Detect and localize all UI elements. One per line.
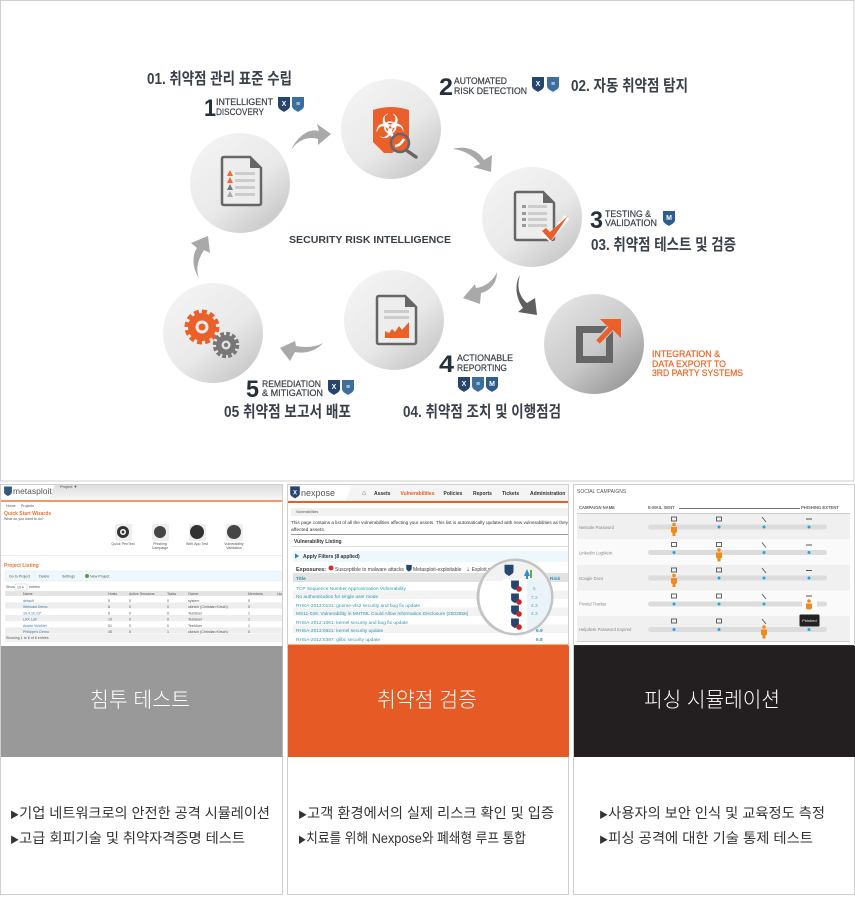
screenshot: nexpose: nexpose: [301, 488, 335, 498]
screenshot: nexpose: ⇣ Exploit public: [466, 567, 502, 573]
screenshot: metasploit: 0: [129, 618, 131, 622]
screenshot: nexpose: Apply Filters (8 applied): [303, 554, 360, 560]
screenshot: metasploit: Project ▼: [60, 484, 78, 489]
step 4 label: [439, 351, 513, 378]
step 2 product icons: ≡: [551, 81, 555, 88]
screenshot: metasploit: Home: [6, 504, 16, 508]
step 3 product icon: M: [666, 215, 672, 222]
screenshot: social campaigns: Netsuite Password: [579, 525, 615, 530]
screenshot: metasploit: Upd: [277, 592, 284, 596]
integration label: DATA EXPORT TO: [652, 359, 726, 370]
screenshot: metasploit: Quick Start Wizards: [4, 511, 51, 517]
bullet list: penetration testing: ▶고급 회피기술 및 취약자격증명 테스트: [10, 830, 245, 846]
screenshot: metasploit: 0: [129, 599, 131, 603]
center title: SECURITY RISK INTELLIGENCE: [289, 234, 451, 246]
step 2 circle: biohazard shield: [341, 79, 441, 179]
step 1 label: [204, 95, 273, 122]
screenshot: nexpose: Assets: [374, 491, 391, 497]
bullet list: phishing simulation: [599, 805, 825, 846]
tooltip: Phished: [802, 618, 817, 623]
bullet list: penetration testing: [10, 805, 270, 846]
screenshot: metasploit: Settings: [62, 574, 75, 578]
step 2 product icons: X: [536, 81, 541, 88]
stage icons: [672, 517, 812, 624]
orange markers: [671, 523, 817, 638]
step 4 label: REPORTING: [457, 363, 507, 374]
screenshot: metasploit: Tasks: [167, 592, 176, 596]
step 5 heading: 05 취약점 보고서 배포: [224, 403, 351, 421]
screenshot: metasploit: Active Sessions: [129, 592, 155, 596]
screenshot: nexpose: Title: [296, 576, 306, 582]
step 3 label: 3: [590, 207, 603, 234]
step 4 circle: report with chart: [344, 270, 444, 370]
integration circle: export icon: [544, 294, 644, 394]
screenshot: social campaigns: [574, 485, 854, 646]
panel: vulnerability validation: [288, 484, 569, 894]
screenshot: nexpose: MS11-026: Vulnerability in MHTML Could Allow Information Disclosure (2503658): [296, 611, 469, 617]
screenshot: metasploit: ckirsch (Christian Kirsch): [188, 605, 228, 609]
screenshot: social campaigns: Pivotal Tracker: [579, 602, 607, 606]
step 5 product icons: X: [332, 384, 337, 391]
step 1 label: 1: [204, 95, 216, 122]
screenshot: metasploit: Project Listing: [4, 563, 39, 569]
screenshot: metasploit: Vulnerability: [224, 542, 244, 546]
screenshot: social campaigns: LinkedIn LogMeIn: [579, 550, 613, 556]
screenshot: metasploit: TestUser: [188, 618, 203, 622]
screenshot: metasploit: 0: [248, 605, 250, 609]
bullet list: vulnerability validation: ▶고객 환경에서의 실제 리스크 확인 및 입증: [298, 805, 554, 821]
step 5 product icons: [328, 380, 354, 395]
step 4 product icons: M: [489, 381, 495, 388]
band: vulnerability validation: 취약점 검증: [377, 689, 477, 712]
screenshot: nexpose: Vulnerabilities: [400, 491, 435, 497]
step 3 product icon: [663, 211, 675, 226]
band: penetration testing: [1, 646, 282, 757]
screenshot: metasploit: Name: [23, 592, 33, 596]
screenshot: metasploit: Show: [6, 585, 15, 589]
step 1 label: DISCOVERY: [216, 107, 265, 118]
screenshot: metasploit: Campaign: [152, 546, 168, 550]
screenshot: metasploit: system: [188, 599, 199, 603]
screenshot: nexpose: RHSA-2012:1061: kernel security and bug fix update: [296, 620, 408, 626]
step 3 label: [590, 207, 657, 234]
screenshot: metasploit: 0: [129, 624, 131, 628]
step 5 product icons: ≡: [346, 384, 350, 391]
screenshot: nexpose: RHSA-2013:0131: gnome-vfs2 security and bug fix update: [296, 603, 420, 609]
screenshot: metasploit: Owner: [188, 592, 199, 596]
integration label: 3RD PARTY SYSTEMS: [652, 368, 743, 379]
screenshot: metasploit: 0: [129, 612, 131, 616]
screenshot: nexpose: Vulnerabilities: [296, 510, 318, 514]
tracks: [648, 524, 827, 632]
step 2 label: [439, 74, 527, 101]
screenshot: metasploit: Webcast Demo: [23, 605, 48, 609]
screenshot: metasploit: TestUser: [188, 612, 203, 616]
step 1 label: INTELLIGENT: [216, 97, 273, 108]
screenshot: metasploit: Austin VulnNet: [23, 624, 47, 628]
magnifier: 7.2: [531, 595, 538, 601]
arrow: step 5 to step 1: [191, 236, 210, 278]
screenshot: metasploit: Go to Project: [9, 574, 30, 578]
band: penetration testing: 침투 테스트: [90, 689, 190, 712]
panel: phishing simulation: [574, 484, 855, 894]
step 1 heading: 01. 취약점 관리 표준 수립: [147, 70, 292, 88]
step 1 product icons: X: [282, 101, 287, 108]
screenshot: metasploit: 1: [248, 612, 250, 616]
step 2 label: AUTOMATED: [454, 76, 507, 87]
screenshot: metasploit: 0: [129, 630, 131, 634]
screenshot: metasploit: 0: [248, 599, 250, 603]
screenshot: metasploit: 10: [108, 618, 112, 622]
step 5 circle: gears: [163, 283, 263, 383]
step 1 product icons: ≡: [296, 101, 300, 108]
screenshot: metasploit: 0: [167, 599, 169, 603]
bullet list: vulnerability validation: [298, 805, 554, 846]
panel: security risk intelligence cycle: [0, 0, 854, 481]
screenshot: metasploit: 10 ▾: [17, 586, 24, 590]
screenshot: metasploit: 0: [167, 612, 169, 616]
screenshot: metasploit: Phishing: [153, 542, 167, 546]
screenshot: social campaigns: Google Docs: [579, 576, 603, 581]
screenshot: metasploit: 10.4.10.23*: [23, 612, 42, 616]
magnifier: 4.3: [531, 611, 538, 617]
screenshot: nexpose: [288, 485, 569, 646]
screenshot: nexpose: 6.9: [536, 628, 543, 634]
screenshot: social campaigns: PHISHING EXTENT: [801, 505, 839, 510]
screenshot: nexpose: Exposures:: [296, 567, 326, 573]
step 4 heading: 04. 취약점 조치 및 이행점검: [403, 402, 561, 421]
screenshot: metasploit: Showing 1 to 6 of 6 entries: [6, 636, 49, 640]
screenshot: metasploit: TestUser: [188, 624, 203, 628]
screenshot: metasploit: 1: [248, 618, 250, 622]
bullet list: phishing simulation: ▶사용자의 보안 인식 및 교육정도 측정: [599, 805, 825, 821]
screenshot: metasploit: Quick PenTest: [111, 542, 135, 546]
band: vulnerability validation: [288, 646, 569, 757]
screenshot: nexpose: Vulnerability Listing: [294, 539, 342, 545]
screenshot: nexpose: Reports: [473, 491, 492, 497]
screenshot: metasploit: 0: [167, 618, 169, 622]
screenshot: nexpose: RHSA-2012:0397: glibc security update: [296, 637, 380, 643]
step 4 label: ACTIONABLE: [457, 353, 513, 364]
integration label: INTEGRATION &: [652, 349, 721, 360]
screenshot: nexpose: Metasploit-exploitable: [413, 567, 462, 573]
arrow: step 4 to step 5: [280, 341, 323, 361]
screenshot: metasploit: What do you want to do?: [4, 517, 44, 521]
screenshot: metasploit: 0: [108, 599, 110, 603]
integration label: [652, 349, 743, 379]
screenshot: metasploit: 0: [248, 630, 250, 634]
screenshot: metasploit: default: [23, 599, 34, 603]
magnifier: [478, 560, 552, 634]
bullet list: penetration testing: ▶기업 네트워크로의 안전한 공격 시뮬레이션: [10, 805, 270, 821]
step 4 product icons: ≡: [476, 381, 480, 388]
step 4 label: 4: [439, 351, 455, 378]
magnifier: 4.3: [531, 603, 538, 609]
screenshot: nexpose: Tickets: [502, 491, 519, 497]
screenshot: metasploit: Projects: [21, 504, 34, 508]
screenshot: metasploit: Web App Test: [186, 542, 208, 546]
screenshot: metasploit: Delete: [39, 574, 49, 578]
magnifier: 5: [533, 586, 536, 592]
step 5 label: 5: [246, 376, 259, 403]
step 1 circle: discovery document: [190, 133, 290, 233]
screenshot: metasploit: 0: [129, 605, 131, 609]
bullet list: vulnerability validation: ▶치료를 위해 Nexpose와 폐쇄형 루프 통합: [298, 830, 526, 846]
step 2 product icons: [532, 77, 559, 92]
screenshot: metasploit: 1: [248, 624, 250, 628]
screenshot: metasploit: ckirsch (Christian Kirsch): [188, 630, 228, 634]
step 3 label: TESTING &: [605, 209, 652, 220]
step 1 product icons: [278, 97, 304, 112]
arrow: step 2 to step 3: [453, 148, 492, 172]
bullet list: phishing simulation: ▶피싱 공격에 대한 기술 통제 테스트: [599, 830, 813, 846]
step 2 label: RISK DETECTION: [454, 86, 527, 97]
screenshot: metasploit: 45: [108, 630, 112, 634]
screenshot: metasploit: Members: [248, 592, 263, 596]
step 2 circle: biohazard shield: ☣: [375, 107, 405, 146]
step 3 circle: validated document: [482, 167, 582, 267]
screenshot: social campaigns: CAMPAIGN NAME: [579, 505, 615, 510]
step 2 heading: 02. 자동 취약점 탐지: [571, 77, 688, 95]
step 4 product icons: [458, 377, 498, 392]
screenshot: metasploit: New Project: [90, 574, 109, 578]
panel: penetration testing: [0, 484, 284, 894]
screenshot: nexpose: affected assets.: [291, 527, 325, 533]
screenshot: social campaigns: E-MAIL SENT: [648, 505, 675, 510]
screenshot: metasploit: 0: [167, 624, 169, 628]
screenshot: social campaigns: SOCIAL CAMPAIGNS: [577, 489, 627, 495]
screenshot: metasploit: entries: [29, 585, 40, 589]
screenshot: metasploit: metasploit: [13, 486, 52, 496]
tooltip: [800, 614, 820, 626]
step 5 label: & MITIGATION: [262, 388, 323, 399]
step 3 heading: 03. 취약점 테스트 및 검증: [591, 236, 736, 254]
screenshot: nexpose: Policies: [444, 491, 463, 497]
band: phishing simulation: [574, 646, 855, 757]
screenshot: social campaigns: Helpdesk Password Expired: [579, 627, 632, 632]
step 2 label: 2: [439, 74, 453, 101]
screenshot: nexpose: Administration: [530, 491, 565, 497]
screenshot: nexpose: Risk: [550, 576, 560, 582]
screenshot: nexpose: 6.8: [536, 637, 543, 643]
band: phishing simulation: 피싱 시뮬레이션: [644, 689, 780, 712]
screenshot: metasploit: [1, 484, 284, 646]
arrow: step 3 to step 4: [463, 272, 497, 304]
screenshot: metasploit: Philippe's Demo: [23, 630, 49, 634]
screenshot: metasploit: 51: [108, 624, 112, 628]
screenshot: metasploit: 6: [108, 612, 110, 616]
screenshot: nexpose: This page contains a list of all the vulnerabilities affecting your assets. This list is automatically updated with new vulnerabilities as they: [291, 520, 569, 526]
screenshot: nexpose: TCP Sequence Number Approximation Vulnerability: [296, 586, 406, 592]
screenshot: nexpose: No authentication for single user mode: [296, 594, 378, 600]
screenshot: metasploit: LAX Lab: [23, 618, 37, 622]
step 5 label: [246, 376, 323, 403]
screenshot: nexpose: RHSA-2013:0621: kernel security update: [296, 628, 384, 634]
step 3 label: VALIDATION: [605, 218, 657, 229]
arrow: step 3 to integration: [516, 275, 537, 315]
step 5 label: REMEDIATION: [262, 379, 321, 390]
screenshot: nexpose: ⌂: [362, 490, 366, 497]
screenshot: metasploit: Hosts: [108, 592, 117, 596]
screenshot: nexpose: X: [293, 490, 297, 496]
screenshot: metasploit: 1: [167, 630, 169, 634]
screenshot: nexpose: Susceptible to malware attacks: [335, 567, 404, 573]
arrow: step 1 to step 2: [291, 124, 331, 150]
screenshot: metasploit: 6: [108, 605, 110, 609]
screenshot: metasploit: Validation: [226, 546, 242, 550]
step 4 product icons: X: [462, 381, 467, 388]
screenshot: metasploit: 0: [167, 605, 169, 609]
